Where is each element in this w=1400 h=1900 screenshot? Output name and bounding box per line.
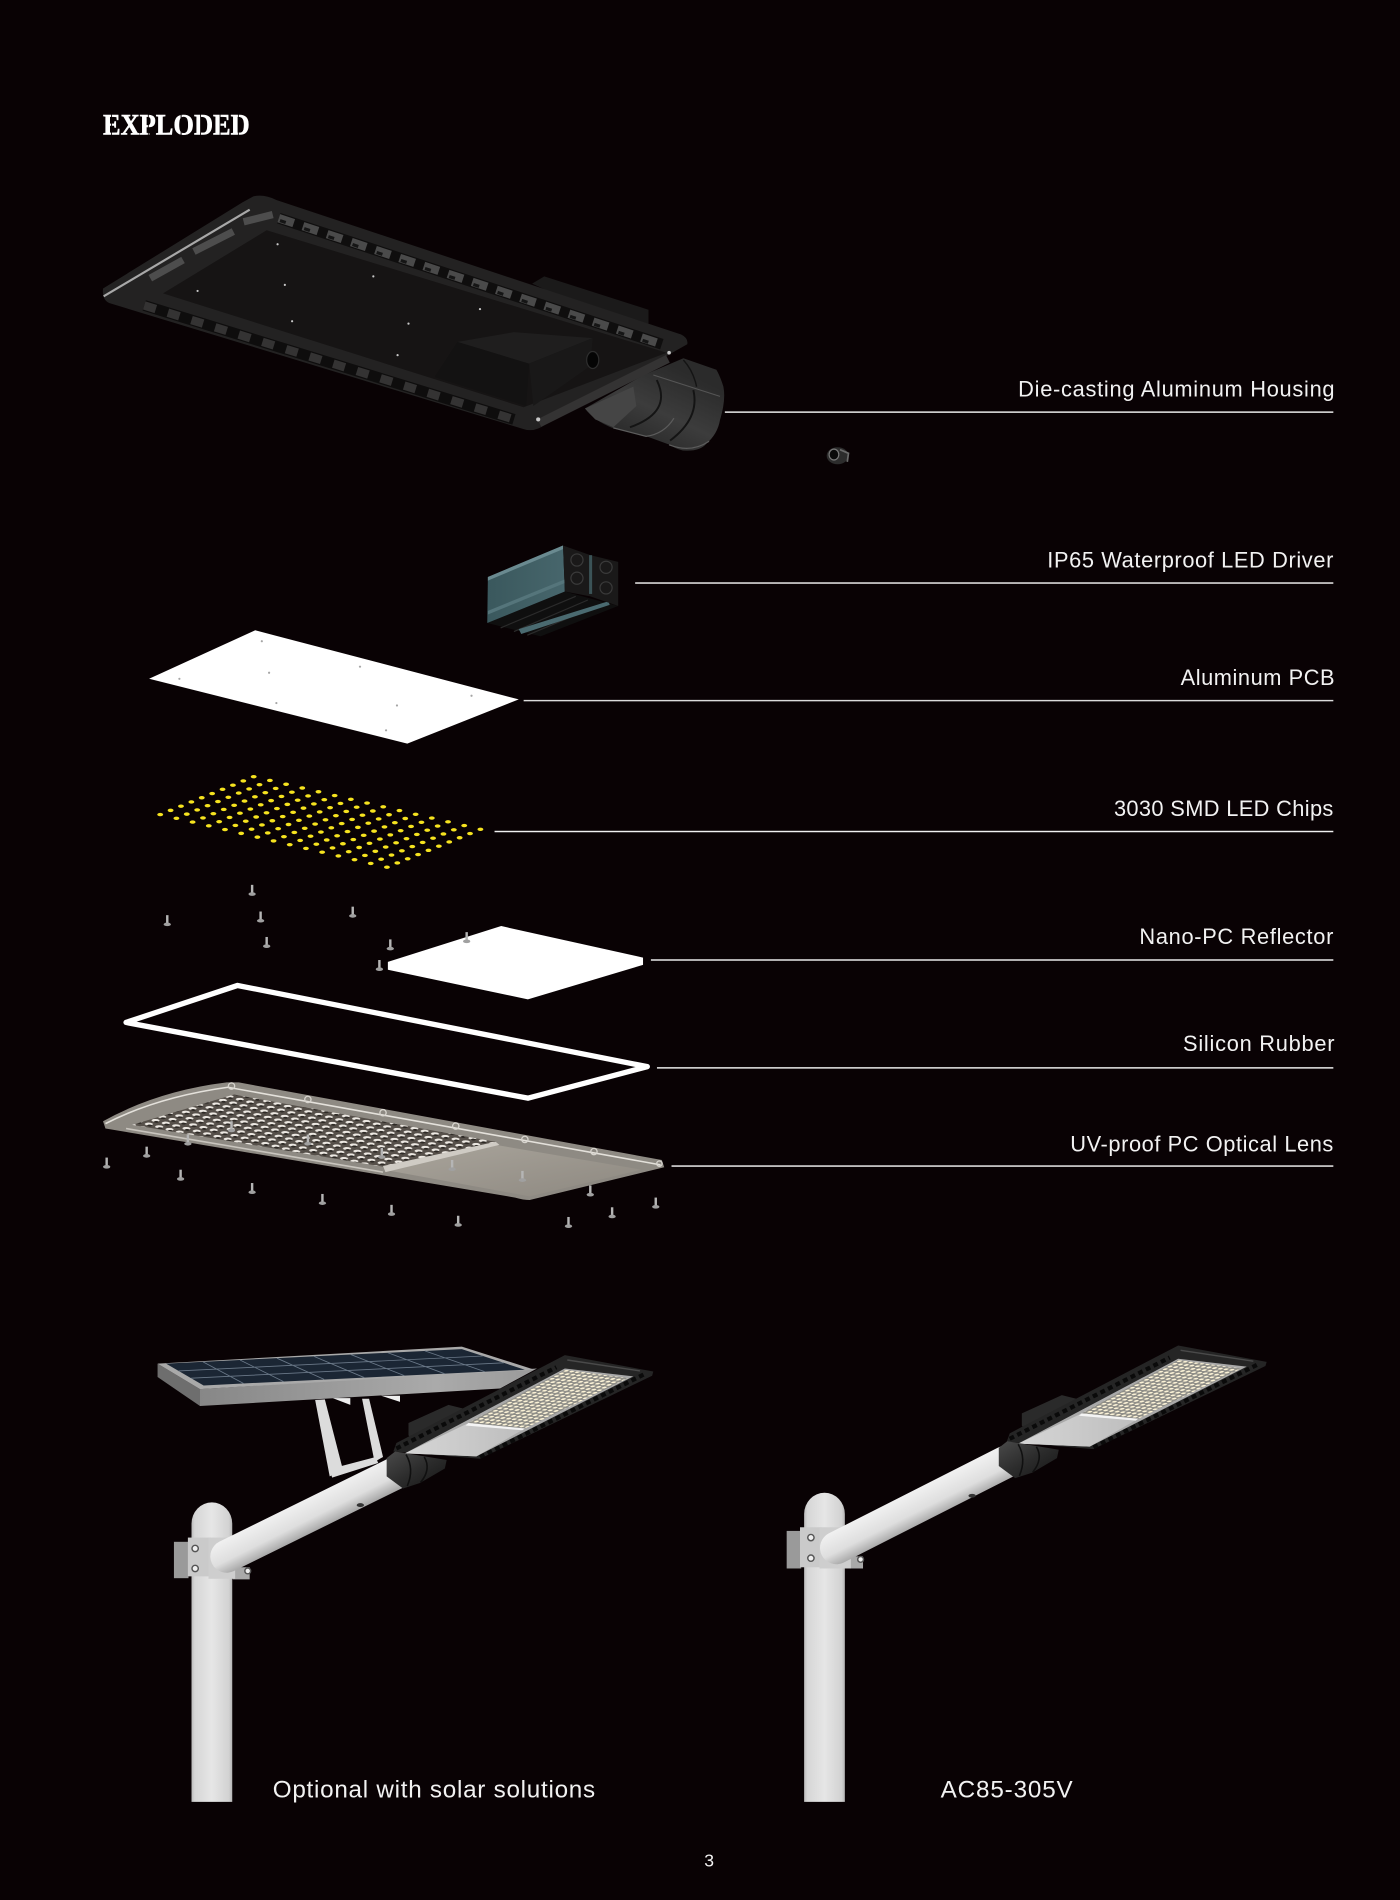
lens frame highlights xyxy=(105,1087,661,1165)
lamp coupler xyxy=(387,1452,447,1488)
housing inner floor xyxy=(163,230,667,407)
product: solar street light xyxy=(158,1347,653,1802)
pole clamp xyxy=(174,1538,251,1579)
housing rim highlight xyxy=(104,210,250,296)
label: optical lens: UV-proof PC Optical Lens xyxy=(1070,1132,1333,1157)
title: EXPLODED xyxy=(103,110,250,142)
label: PCB: Aluminum PCB xyxy=(1181,665,1335,690)
pole xyxy=(192,1502,232,1802)
driver teal body xyxy=(487,545,565,623)
label: LED chips: 3030 SMD LED Chips xyxy=(1114,796,1333,821)
caption: solar: Optional with solar solutions xyxy=(273,1777,595,1804)
component: die-casting aluminum housing xyxy=(103,196,724,451)
lens screw bosses xyxy=(228,1083,662,1166)
icon: small cable nut xyxy=(827,447,848,464)
pole xyxy=(804,1493,845,1802)
lamp head xyxy=(1007,1345,1267,1449)
arm xyxy=(836,1462,1005,1548)
housing end rail xyxy=(539,359,668,423)
component: aluminum PCB xyxy=(149,630,519,744)
label: reflector: Nano-PC Reflector xyxy=(1139,924,1333,949)
lens flat section xyxy=(384,1145,641,1196)
lamp head xyxy=(393,1355,653,1459)
lens outer body xyxy=(103,1082,664,1200)
housing ribs xyxy=(279,218,662,344)
page number: 3 xyxy=(704,1851,714,1871)
arm xyxy=(227,1473,395,1556)
driver fins xyxy=(487,592,618,636)
housing driver box xyxy=(435,332,599,406)
caption: AC: AC85-305V xyxy=(941,1777,1074,1804)
component: IP65 LED driver xyxy=(487,545,618,636)
solar panel bracket xyxy=(315,1396,400,1478)
screws under lens xyxy=(103,1121,659,1228)
component: silicon rubber ring xyxy=(126,985,647,1098)
component: LED chips grid xyxy=(157,775,483,869)
pole clamp xyxy=(787,1527,864,1568)
label: driver: IP65 Waterproof LED Driver xyxy=(1047,547,1333,572)
component: optical lens xyxy=(103,1082,664,1200)
label: silicon rubber: Silicon Rubber xyxy=(1183,1031,1335,1056)
screws above reflector xyxy=(164,885,394,971)
housing outer body xyxy=(103,196,687,430)
lens array xyxy=(132,1095,496,1167)
component: nano-PC reflector xyxy=(388,926,643,999)
housing mounting points xyxy=(196,243,671,421)
housing cylinder xyxy=(585,358,724,451)
product: AC street light xyxy=(787,1345,1267,1802)
solar panel xyxy=(158,1347,537,1406)
lamp coupler xyxy=(999,1441,1059,1478)
label: housing: Die-casting Aluminum Housing xyxy=(1018,376,1335,401)
driver end face xyxy=(563,545,618,606)
housing mounting box behind xyxy=(532,276,648,324)
